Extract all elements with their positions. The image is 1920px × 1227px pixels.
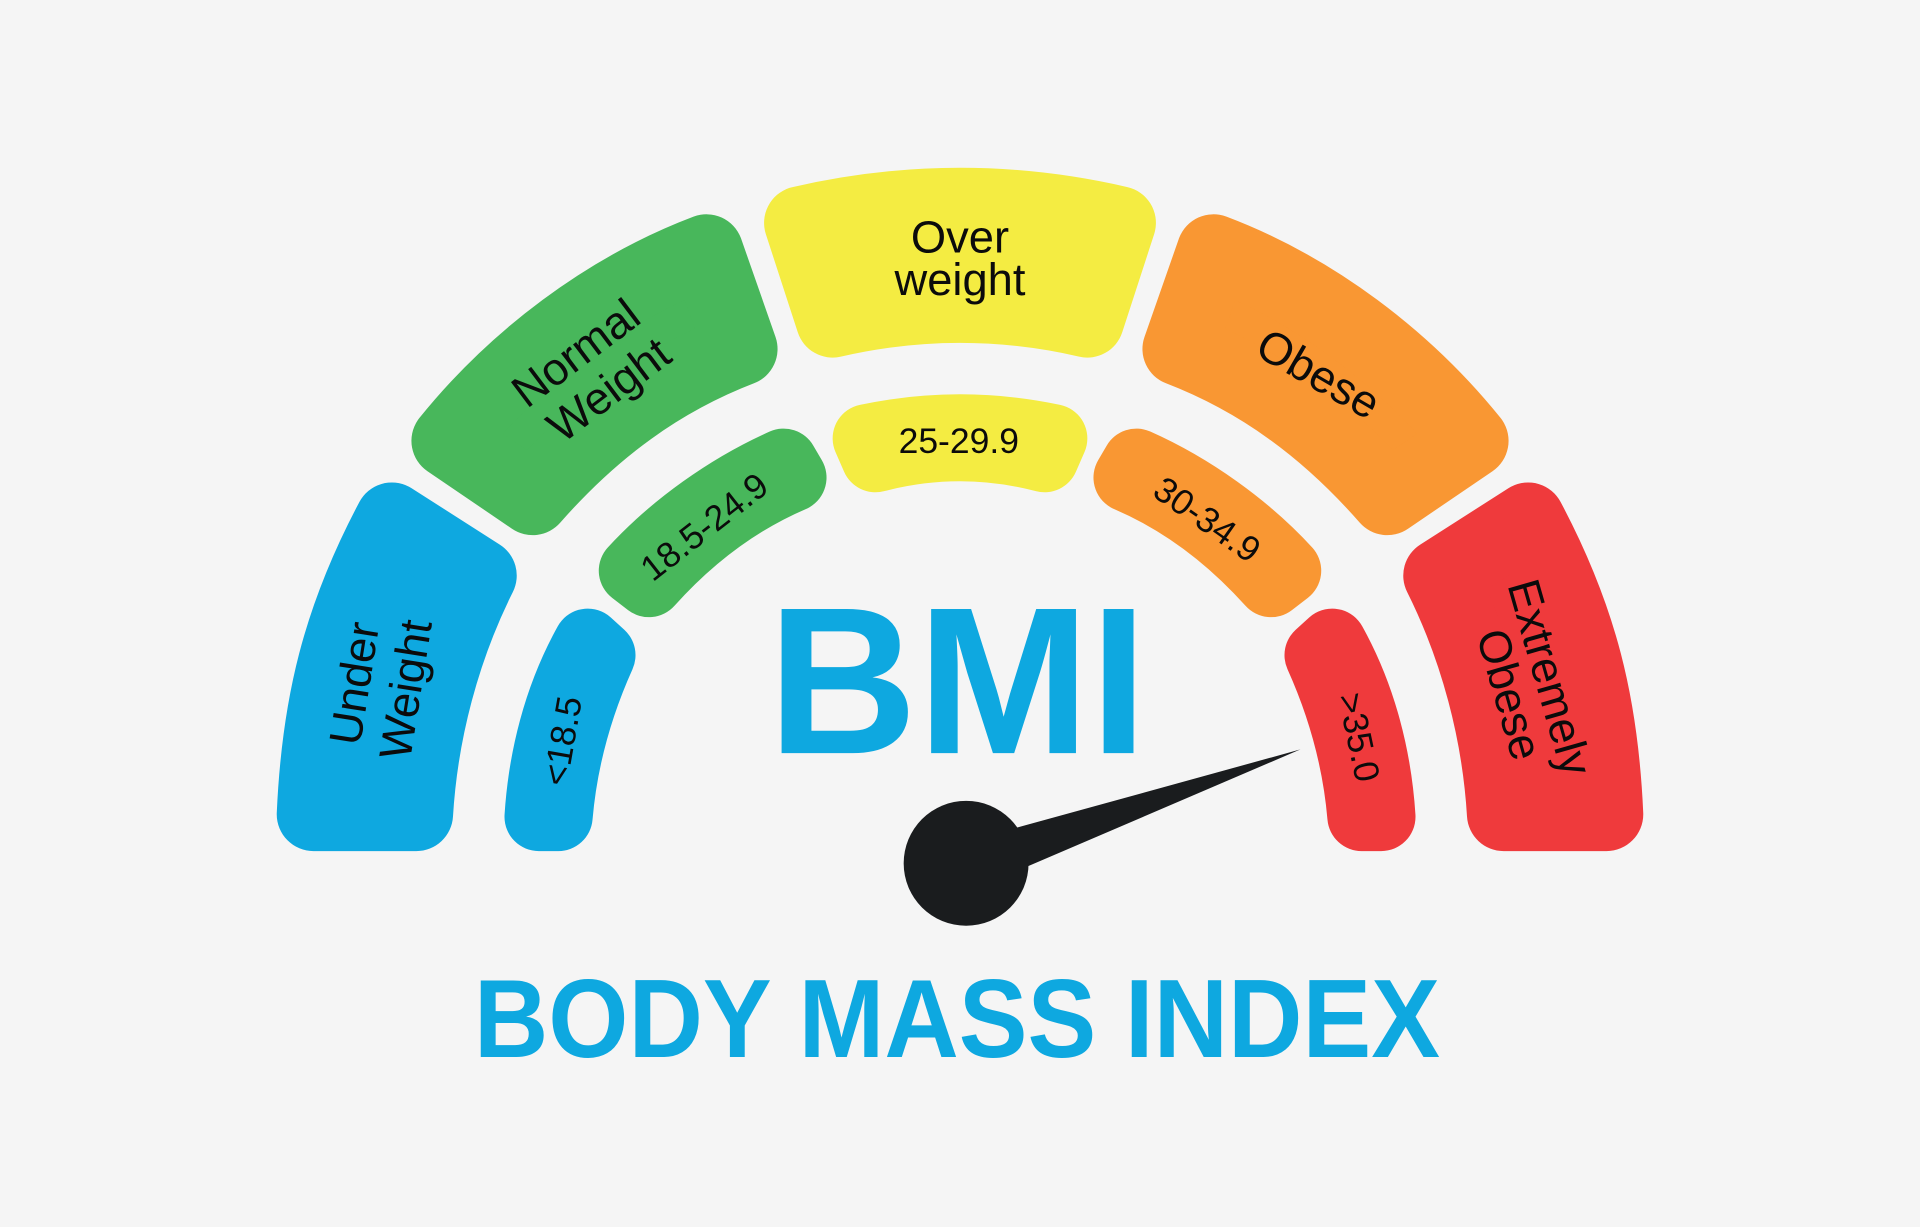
- segment: extremely obese: Extremely: [1498, 573, 1602, 781]
- segment: under weight: [313, 519, 480, 814]
- range: 30-34.9: [1128, 463, 1287, 583]
- range: above 35.0: >35.0: [1330, 689, 1388, 785]
- segment: under weight: Weight: [370, 616, 442, 763]
- title: body mass index: BODY MASS INDEX: [474, 956, 1440, 1081]
- segment: normal weight: Normal: [502, 289, 649, 417]
- segment: extremely obese: Obese: [1467, 623, 1552, 766]
- gauge needle: [904, 749, 1300, 926]
- segment: overweight: Over: [911, 211, 1009, 262]
- range: above 35.0: [1319, 643, 1388, 817]
- segment: normal weight: Weight: [537, 327, 680, 452]
- segment: overweight: weight: [894, 254, 1026, 305]
- segment: normal weight: [448, 251, 741, 498]
- segment: obese: Obese: [1248, 318, 1389, 429]
- range: below 18.5: <18.5: [535, 693, 590, 789]
- range: below 18.5: [535, 643, 601, 817]
- segment: obese: [1179, 251, 1472, 498]
- range: 30-34.9: 30-34.9: [1146, 469, 1268, 570]
- heading: BMI: BMI: [768, 564, 1147, 798]
- outer ring of category segments: [313, 204, 1607, 814]
- segment: under weight: Under: [319, 618, 389, 748]
- range: 25-29.9: 25-29.9: [899, 421, 1019, 461]
- segment: overweight: [801, 204, 1119, 321]
- segment: extremely obese: [1440, 519, 1607, 814]
- range: 18.5-24.9: 18.5-24.9: [633, 465, 776, 589]
- range: 25-29.9: [867, 421, 1053, 461]
- inner ring of BMI ranges: [535, 421, 1388, 817]
